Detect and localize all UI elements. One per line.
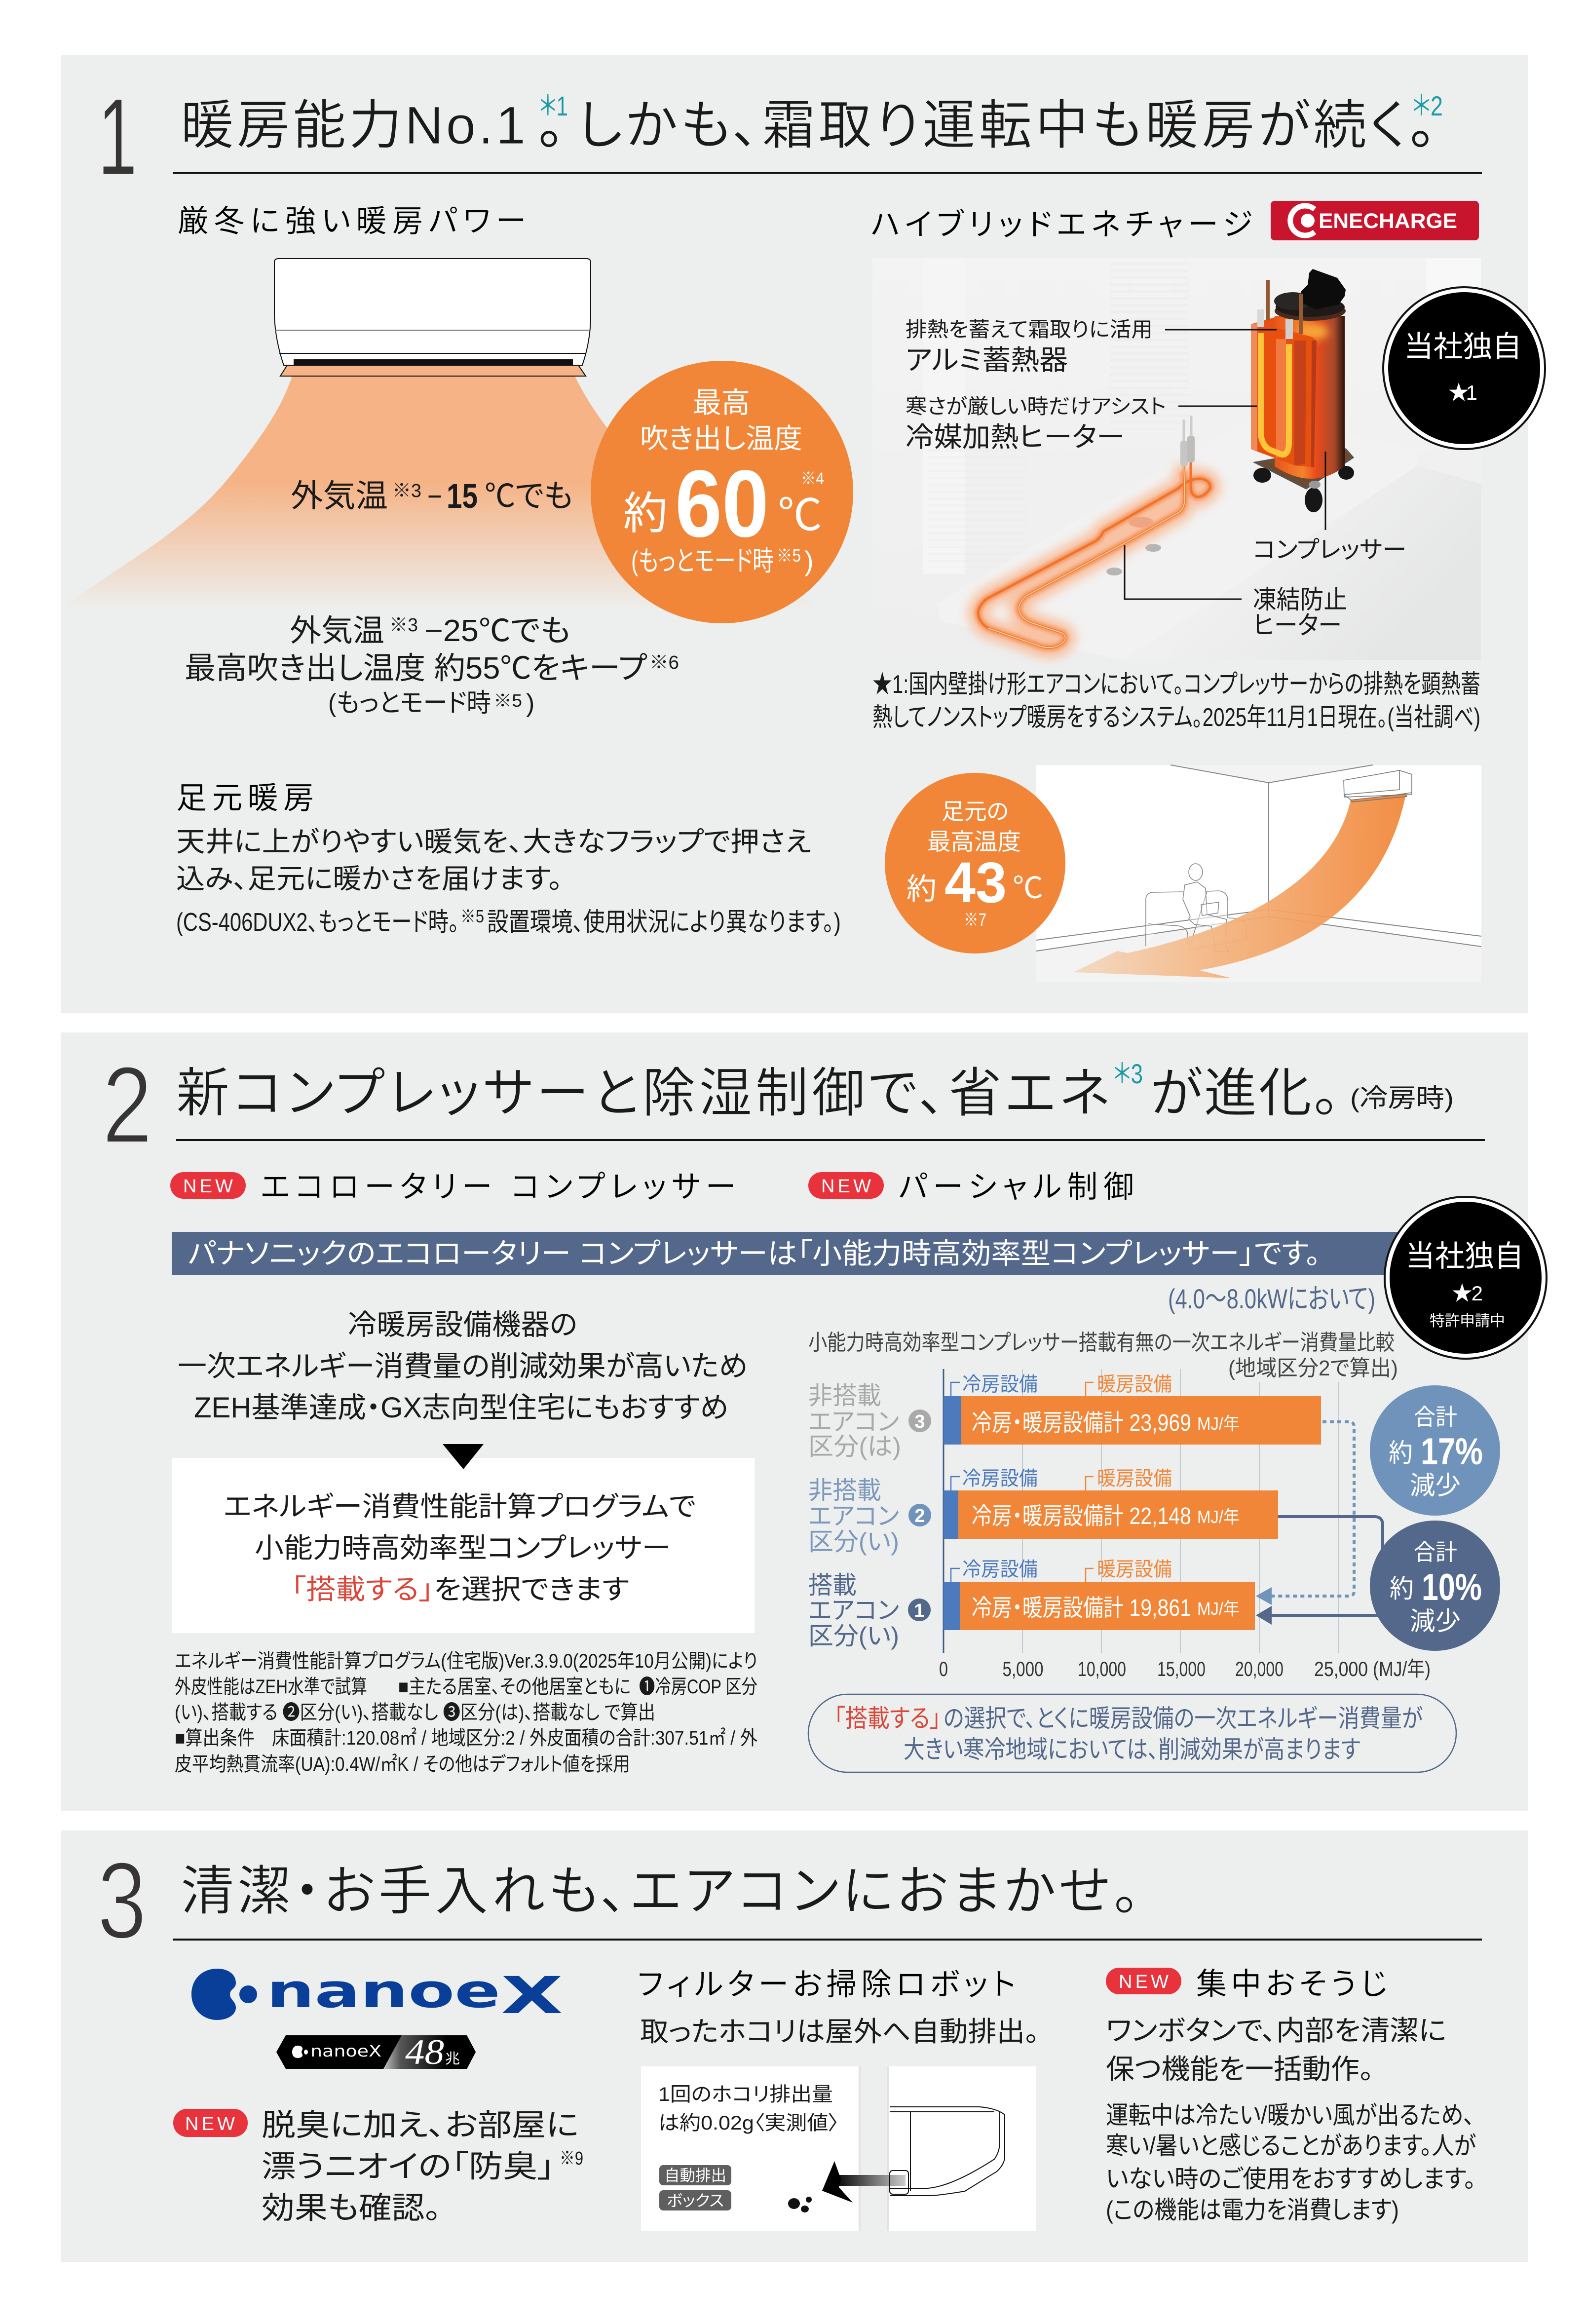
text: zeh recommendation: 冷暖房設備機器の <box>348 1309 577 1341</box>
callout: about 17 percent <box>1370 1385 1500 1516</box>
logo: nanoe X: nanoe <box>266 1965 500 2019</box>
text: floor heating description: 天井に上がりやすい暖気を、大きなフラップで押さえ <box>176 826 811 857</box>
tag: auto discharge box: ボックス <box>667 2192 724 2210</box>
label: new concentrated cleaning: 集中おそうじ <box>1196 1967 1387 2001</box>
heading: severe winter heating power: 厳冬に強い暖房パワー <box>178 204 526 238</box>
row: with, zone i: 搭載 <box>808 1571 857 1599</box>
heading: hybrid enecharge: ハイブリッドエネチャージ <box>871 208 1252 242</box>
callout: about 10 percent: 減少 <box>1410 1607 1461 1636</box>
text: floor heating description: 設置環境、使用状況により異なります。) <box>487 908 841 937</box>
caption: star 1 note <box>872 670 1480 732</box>
label: new odor prevention: 効果も確認。 <box>262 2191 441 2225</box>
callout: about 17 percent: 約 <box>1389 1439 1413 1468</box>
row: with, zone i: 冷房設備 <box>962 1559 1038 1580</box>
callout: conclusion: 「搭載する」 <box>834 1705 941 1732</box>
badge: nanoe X 48 trillion <box>276 2032 476 2072</box>
callout: floor temperature 43C: ℃ <box>1013 872 1043 905</box>
axis labels: 15,000 <box>1157 1657 1206 1680</box>
figure: room with warm air flow <box>1036 765 1481 982</box>
callout: conclusion: 大きい寒冷地域においては、削減効果が高まります <box>904 1736 1360 1763</box>
badge: nanoe X 48 trillion: 48 <box>405 2032 444 2072</box>
callout: selection box: 「搭載する」 <box>291 1574 434 1605</box>
callout: max outlet temperature 60C: 60 <box>675 450 769 557</box>
text: outside temperature -15: − <box>427 480 442 513</box>
row: without, zone ha <box>808 1373 1321 1460</box>
icon: indoor unit <box>1344 770 1412 802</box>
text: floor heating description: ※5 <box>460 906 484 926</box>
text: floor heating description <box>176 826 841 937</box>
callout: max outlet temperature 60C: 最高 <box>693 387 750 419</box>
section 1 title: 暖房能力No.1 <box>181 95 526 155</box>
label: new eco rotary compressor: エコロータリー コンプレッサー <box>261 1170 736 1204</box>
text: outside temperature -25: ※3 <box>389 615 418 636</box>
section 2 title: が進化。 <box>1150 1063 1340 1123</box>
label: refrigerant heater <box>906 395 1166 453</box>
callout: floor temperature 43C: 足元の <box>942 799 1009 824</box>
label: refrigerant heater: 冷媒加熱ヒーター <box>906 421 1125 453</box>
row: with, zone i: MJ/年 <box>1197 1599 1240 1619</box>
label: new partial control: パーシャル制御 <box>899 1170 1134 1204</box>
label: new odor prevention: NEW <box>185 2114 235 2134</box>
callout: max outlet temperature 60C <box>591 361 853 623</box>
row: with, zone i: エアコン <box>808 1597 899 1624</box>
label: anti-freeze heater: ヒーター <box>1253 611 1342 640</box>
row: with, zone i: 冷房・暖房設備計 19,861 <box>972 1595 1191 1621</box>
heater pipe <box>978 462 1210 648</box>
label: refrigerant heater: 寒さが厳しい時だけアシスト <box>906 395 1166 418</box>
text: outside temperature -25: (もっとモード時 <box>328 689 491 718</box>
panel: section 1 heating power <box>61 55 1528 1013</box>
text: calculation notes: ■算出条件 床面積計:120.08㎡ / 地域区分:2 / 外皮面積の合計:307.51㎡ / 外 <box>175 1727 757 1749</box>
callout: selection box: 小能力時高効率型コンプレッサー <box>255 1532 671 1563</box>
callout: max outlet temperature 60C: ) <box>804 545 814 576</box>
row: without, zone ha: エアコン <box>808 1408 899 1436</box>
row: with, zone i: 暖房設備 <box>1097 1559 1172 1580</box>
text: calculation notes: (い)、搭載する ❷区分(い)、搭載なし ❸区分(は)、搭載なし で算出 <box>175 1702 655 1723</box>
section 1 title: 。 <box>538 95 565 155</box>
section 2 title: (冷房時) <box>1350 1084 1454 1113</box>
text: calculation notes: 外皮性能はZEH水準で試算 <box>175 1676 367 1698</box>
text: dust discharge: 取ったホコリは屋外へ自動排出。 <box>640 2016 1039 2047</box>
callout: about 17 percent: 合計 <box>1414 1404 1457 1430</box>
callout: conclusion <box>808 1694 1456 1772</box>
icon: sofa and seated person <box>1146 864 1246 952</box>
badge: company original star 2: ★2 <box>1452 1282 1483 1305</box>
text: zeh recommendation <box>178 1309 748 1424</box>
badge: company original star 1 <box>1382 286 1546 450</box>
text: concentrated cleaning description: 寒い/暑いと感じることがあります。人が <box>1106 2132 1476 2160</box>
logo: enecharge <box>1271 201 1479 240</box>
section 3 title: 清潔・お手入れも、エアコンにおまかせ。 <box>181 1861 1140 1921</box>
callout: floor temperature 43C: 43 <box>944 850 1007 914</box>
label: compressor: コンプレッサー <box>1253 537 1406 563</box>
label: new odor prevention: 脱臭に加え、お部屋に <box>262 2108 579 2142</box>
row: without, zone i: 2 <box>914 1506 925 1526</box>
callout: floor temperature 43C <box>885 773 1065 953</box>
tag: auto discharge box <box>659 2165 731 2210</box>
figure: dust discharge <box>641 2066 1036 2231</box>
callout: selection box <box>172 1458 755 1633</box>
text: concentrated cleaning description: (この機能は電力を消費します) <box>1106 2196 1399 2224</box>
axis labels: 0 <box>939 1657 948 1680</box>
section 2 title: 新コンプレッサーと除湿制御で、省エネ <box>176 1063 1110 1123</box>
row: without, zone i <box>808 1468 1278 1556</box>
callout: about 10 percent <box>1370 1521 1500 1651</box>
row: without, zone i: 冷房・暖房設備計 22,148 <box>972 1503 1191 1529</box>
row: without, zone ha: 暖房設備 <box>1097 1373 1172 1395</box>
section 1 title: 。 <box>1409 95 1436 155</box>
row: without, zone ha: 冷房設備 <box>962 1373 1038 1395</box>
label: new odor prevention: 漂うニオイの「防臭」 <box>262 2150 555 2184</box>
text: concentrated cleaning description: 運転中は冷たい/暖かい風が出るため、 <box>1106 2101 1474 2129</box>
badge: company original star 2: 当社独自 <box>1405 1240 1524 1273</box>
section number 1: 1 <box>98 76 137 197</box>
section 2 title: ＊3 <box>1113 1058 1143 1089</box>
tag: auto discharge box: 自動排出 <box>664 2167 726 2184</box>
row: without, zone i: 暖房設備 <box>1097 1468 1172 1489</box>
arrow: down triangle <box>443 1444 484 1469</box>
row: without, zone i: MJ/年 <box>1197 1507 1240 1527</box>
text: outside temperature -25: ※6 <box>649 652 679 673</box>
bar chart: primary energy consumption <box>808 1369 1500 1680</box>
arrow: dust out <box>788 2161 906 2212</box>
compressor <box>1251 269 1354 512</box>
axis labels: 20,000 <box>1235 1657 1284 1680</box>
warm air flow <box>61 376 819 610</box>
label: aluminium heat storage: 排熱を蓄えて霜取りに活用 <box>906 318 1153 341</box>
label: aluminium heat storage: アルミ蓄熱器 <box>906 344 1068 376</box>
callout: max outlet temperature 60C: 約 <box>623 489 668 538</box>
heading: floor heating: 足元暖房 <box>176 781 314 815</box>
chart title: 小能力時高効率型コンプレッサー搭載有無の一次エネルギー消費量比較 <box>808 1331 1395 1355</box>
callout: floor temperature 43C: 約 <box>906 873 937 906</box>
badge: nanoe X 48 trillion: 兆 <box>445 2051 460 2067</box>
text: calculation notes: エネルギー消費性能計算プログラム(住宅版)Ver.3.9.0(2025年10月公開)により <box>175 1650 757 1672</box>
text: floor heating description: (CS-406DUX2、もっとモード時。 <box>176 908 459 937</box>
label: new odor prevention: ※9 <box>560 2148 583 2169</box>
section 1 title: ＊1 <box>539 90 568 121</box>
text: zeh recommendation: ZEH基準達成・GX志向型住宅にもおすすめ <box>194 1392 728 1424</box>
callout: conclusion: の選択で、とくに暖房設備の一次エネルギー消費量が <box>944 1705 1423 1732</box>
row: with, zone i <box>808 1559 1255 1650</box>
row: without, zone ha: 非搭載 <box>808 1382 881 1410</box>
icon: indoor air conditioner <box>274 259 591 376</box>
axis labels: 5,000 <box>1003 1657 1043 1680</box>
row: with, zone i: 1 <box>914 1600 925 1621</box>
text: outside temperature -25: 最高吹き出し温度 約55℃をキープ <box>185 651 647 686</box>
text: outside temperature -25: 外気温 <box>290 614 384 648</box>
section 2 title <box>176 1058 1454 1123</box>
callout: max outlet temperature 60C: ℃ <box>778 491 822 539</box>
text: calculation notes <box>175 1650 757 1775</box>
section 1 title <box>181 90 1443 155</box>
callout: floor temperature 43C: ※7 <box>964 910 986 930</box>
badge: company original star 1: 当社独自 <box>1404 330 1522 363</box>
callout: about 10 percent: 10% <box>1422 1566 1482 1608</box>
text: floor heating description: 込み、足元に暖かさを届けます。 <box>176 863 563 894</box>
text: concentrated cleaning description: 保つ機能を一括動作。 <box>1106 2054 1374 2085</box>
text: outside temperature -15: 15 <box>447 477 478 515</box>
leader lines <box>1125 330 1325 599</box>
text: outside temperature -25: ※5 <box>493 690 522 711</box>
logo: nanoe X: X <box>501 1966 563 2025</box>
label: anti-freeze heater: 凍結防止 <box>1253 586 1347 614</box>
badge: unit note: (4.0〜8.0kWにおいて) <box>1168 1283 1375 1314</box>
callout: about 17 percent: 減少 <box>1410 1472 1461 1500</box>
text: concentrated cleaning description: いない時のご使用をおすすめします。 <box>1106 2165 1476 2193</box>
callout: selection box: を選択できます <box>434 1574 629 1605</box>
section number 2: 2 <box>102 1044 152 1166</box>
band: eco rotary description <box>172 1232 1406 1275</box>
badge: nanoe X 48 trillion: nanoeX <box>310 2042 381 2060</box>
chart title <box>808 1331 1398 1380</box>
row: without, zone ha: MJ/年 <box>1197 1413 1240 1434</box>
text: zeh recommendation: 一次エネルギー消費量の削減効果が高いため <box>178 1350 748 1382</box>
section number 3: 3 <box>97 1839 147 1961</box>
logo: enecharge: ENECHARGE <box>1319 209 1457 233</box>
callout: max outlet temperature 60C: ※5 <box>777 545 801 566</box>
label: new partial control: NEW <box>821 1176 871 1197</box>
arrow: warm air flow <box>1073 794 1406 978</box>
text: calculation notes: ❶冷房COP 区分 <box>639 1676 757 1698</box>
panel: section 2 compressor and energy saving <box>61 1032 1528 1811</box>
callout: max outlet temperature 60C: 吹き出し温度 <box>640 423 802 454</box>
label: new eco rotary compressor: NEW <box>183 1176 233 1197</box>
band: eco rotary description: パナソニックのエコロータリー コンプレッサーは「小能力時高効率型コンプレッサー」です。 <box>188 1238 1321 1270</box>
label: new odor prevention <box>173 2108 583 2225</box>
row: without, zone ha: 3 <box>914 1411 925 1432</box>
callout: max outlet temperature 60C: ※4 <box>801 469 824 488</box>
label: aluminium heat storage <box>906 318 1153 376</box>
text: calculation notes: 皮平均熱貫流率(UA):0.4W/㎡K / その他はデフォルト値を採用 <box>175 1753 630 1775</box>
arrow: solid comparison <box>1256 1517 1383 1625</box>
text: concentrated cleaning description: ワンボタンで、内部を清潔に <box>1106 2015 1446 2046</box>
text: outside temperature -15 <box>291 477 573 515</box>
callout: about 10 percent: 合計 <box>1414 1539 1457 1565</box>
arrow: dotted comparison <box>1256 1422 1354 1605</box>
text: outside temperature -25: −25℃でも <box>424 614 570 648</box>
heading: filter cleaning robot: フィルターお掃除ロボット <box>638 1968 1016 2002</box>
row: without, zone ha: 区分(は) <box>808 1433 901 1460</box>
callout: about 10 percent: 約 <box>1390 1575 1414 1603</box>
badge: company original star 1: ★1 <box>1448 381 1477 404</box>
text: outside temperature -25 <box>185 614 679 718</box>
figure: dust discharge: 1回のホコリ排出量 <box>658 2084 833 2105</box>
row: without, zone i: エアコン <box>808 1502 899 1530</box>
row: without, zone ha: 冷房・暖房設備計 23,969 <box>972 1410 1191 1436</box>
icon: air conditioner side view <box>890 2107 1005 2196</box>
text: concentrated cleaning description <box>1106 2015 1476 2224</box>
text: outside temperature -15: ※3 <box>392 481 421 501</box>
badge: company original star 2: 特許申請中 <box>1430 1312 1505 1330</box>
label: anti-freeze heater <box>1253 586 1347 640</box>
row: without, zone i: 区分(い) <box>808 1528 899 1556</box>
label: new concentrated cleaning <box>1106 1967 1387 2001</box>
text: outside temperature -25: ) <box>526 689 534 718</box>
label: new concentrated cleaning: NEW <box>1119 1972 1169 1992</box>
row: with, zone i: 区分(い) <box>808 1622 899 1650</box>
logo: nanoe X <box>191 1965 563 2025</box>
text: outside temperature -15: 外気温 <box>291 478 388 514</box>
axis labels: 10,000 <box>1078 1657 1126 1680</box>
section 1 title: しかも、霜取り運転中も暖房が続く <box>577 95 1406 155</box>
text: outside temperature -15: ℃でも <box>485 478 573 514</box>
axis labels <box>939 1657 1431 1680</box>
callout: selection box: エネルギー消費性能計算プログラムで <box>224 1491 696 1522</box>
row: without, zone i: 冷房設備 <box>962 1468 1038 1489</box>
figure: dust discharge: は約0.02g〈実測値〉 <box>658 2112 839 2134</box>
axis labels: 25,000 (MJ/年) <box>1314 1657 1431 1680</box>
text: calculation notes: ■主たる居室、その他居室ともに <box>398 1676 631 1698</box>
callout: floor temperature 43C: 最高温度 <box>927 829 1021 855</box>
callout: max outlet temperature 60C: (もっとモード時 <box>631 545 774 576</box>
panel: section 3 cleaning <box>61 1830 1528 2262</box>
callout: about 17 percent: 17% <box>1421 1431 1483 1473</box>
figure: outdoor unit cutaway <box>872 258 1481 660</box>
section 1 title: ＊2 <box>1412 90 1443 121</box>
row: without, zone i: 非搭載 <box>808 1477 881 1504</box>
chart title: (地域区分2で算出) <box>1228 1356 1398 1380</box>
badge: company original star 2 <box>1384 1196 1548 1360</box>
